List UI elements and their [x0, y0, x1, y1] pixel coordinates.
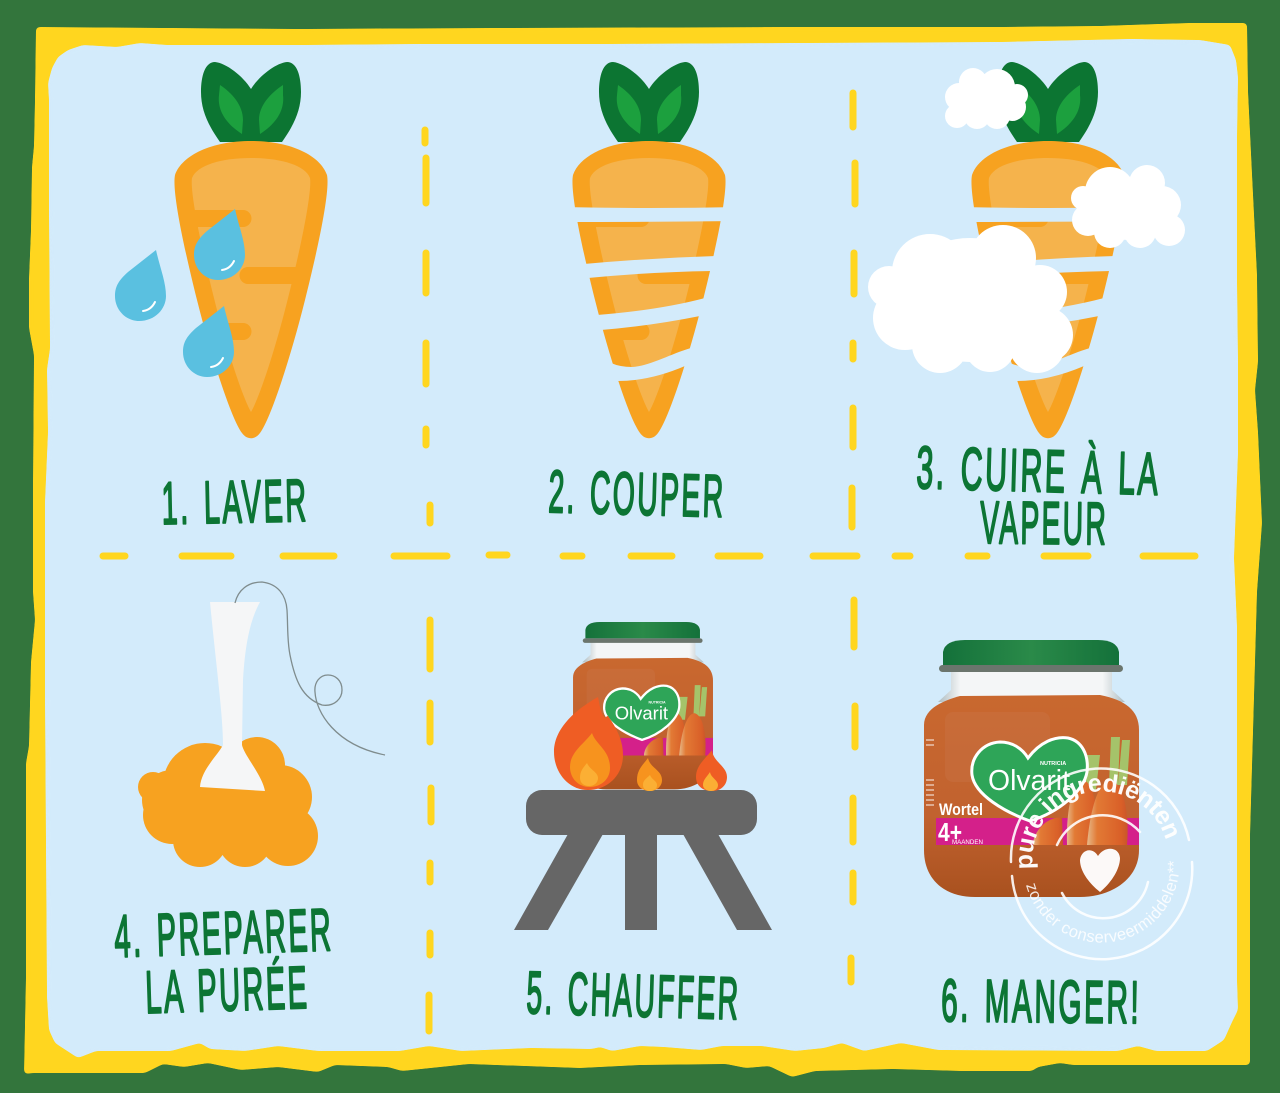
panel: step 2 cut: 2. COUPER	[548, 458, 726, 530]
icon: blender cable	[235, 582, 385, 755]
icon: small jar: Olvarit	[615, 703, 669, 724]
label: step 4: LA PURÉE	[144, 954, 310, 1026]
panel: step 4 blend: 4. PREPARER	[113, 896, 334, 970]
icon: water drops	[115, 209, 245, 377]
icon: small steam cloud	[945, 68, 1028, 129]
icon: right flame	[696, 750, 727, 791]
stamp: pure ingredienten	[1010, 767, 1194, 960]
panel: step 1 wash	[115, 62, 328, 537]
icon: table	[514, 790, 772, 930]
icon: small jar: NUTRICIA	[649, 700, 666, 704]
icon: small jar: Wortel	[583, 727, 611, 739]
icon: large jar: Wortel	[939, 800, 983, 819]
stamp: pure ingredienten: zonder conserveermiddelen**	[1026, 861, 1178, 943]
label: step 3	[916, 434, 1161, 557]
icon: hand blender	[200, 602, 265, 791]
panel: step 5 heat	[514, 622, 772, 1032]
dashed dividers	[103, 93, 1195, 1031]
icon: sliced carrot in steam	[959, 62, 1139, 438]
panel: step 4 blend	[113, 582, 385, 1026]
icon: large jar: NUTRICIA	[1040, 761, 1066, 767]
stamp: pure ingredienten: pure ingrediënten	[1018, 774, 1177, 868]
icon: large jar: Olvarit	[988, 765, 1070, 797]
icon: whole carrot	[174, 62, 328, 438]
label: step 3: VAPEUR	[980, 489, 1109, 557]
panel: step 5 heat: 5. CHAUFFER	[526, 959, 742, 1032]
icon: right steam cloud	[1071, 165, 1185, 248]
icon: large jar	[924, 640, 1139, 897]
icon: sliced carrot	[560, 62, 740, 438]
icon: carrot puree	[138, 737, 318, 867]
panel: step 1 wash: 1. LAVER	[161, 467, 309, 537]
label: step 4	[113, 896, 334, 1026]
icon: small jar	[573, 622, 713, 789]
panel: step 6 eat	[924, 640, 1194, 1036]
icon: large flame	[554, 697, 623, 790]
icon: small flame	[637, 758, 662, 791]
icon: large jar: MAANDEN	[952, 840, 983, 846]
icon: large steam cloud	[868, 225, 1073, 373]
panel: step 3 steam	[868, 62, 1185, 557]
icon: large jar: 4+	[938, 817, 962, 847]
panel: step 2 cut	[548, 62, 740, 530]
